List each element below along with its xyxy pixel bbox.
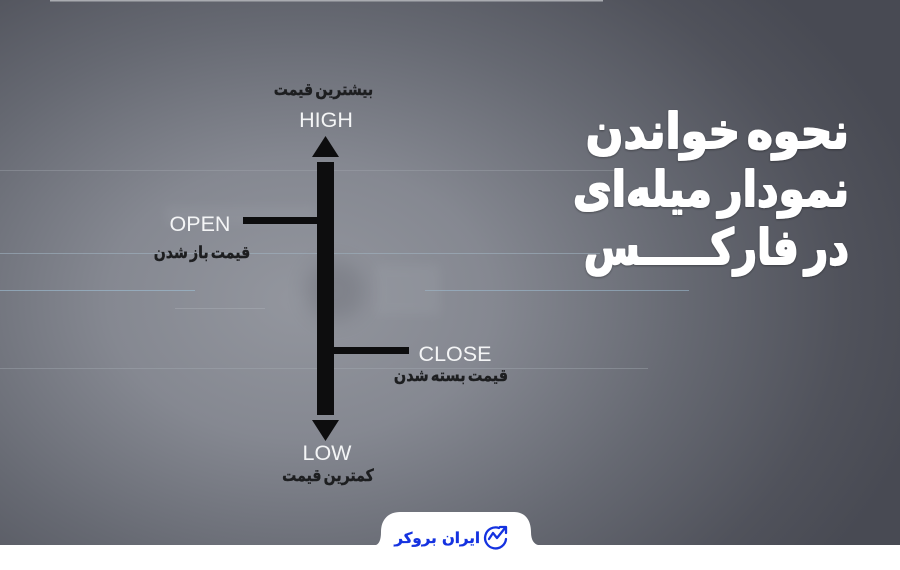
label: OPEN: OPEN <box>170 212 230 236</box>
up arrow <box>312 136 339 157</box>
title: نحوه خواندن <box>586 103 849 160</box>
title: در فارکـــــس <box>584 218 849 276</box>
footer band <box>0 545 900 570</box>
label: closing price: قیمت بسته شدن <box>394 366 508 385</box>
down arrow <box>312 420 339 441</box>
light streaks <box>0 0 689 369</box>
chart: OHLC bar <box>243 136 409 441</box>
smudge behind bar <box>305 261 365 321</box>
vertical bar <box>317 162 334 415</box>
label: CLOSE: CLOSE <box>419 342 491 366</box>
close tick <box>334 347 409 354</box>
open tick <box>243 217 317 224</box>
label: HIGH: HIGH <box>299 108 353 132</box>
label: opening price: قیمت باز شدن <box>154 243 250 262</box>
icon: brand chart mark <box>485 527 506 548</box>
brand name: ایران بروکر <box>393 529 480 547</box>
label: LOW: LOW <box>303 441 352 465</box>
logo tab <box>376 512 538 545</box>
label: highest price: بیشترین قیمت <box>274 80 373 99</box>
title <box>573 103 849 276</box>
label: lowest price: کمترین قیمت <box>282 466 374 485</box>
title: نمودار میله‌ای <box>573 161 849 218</box>
